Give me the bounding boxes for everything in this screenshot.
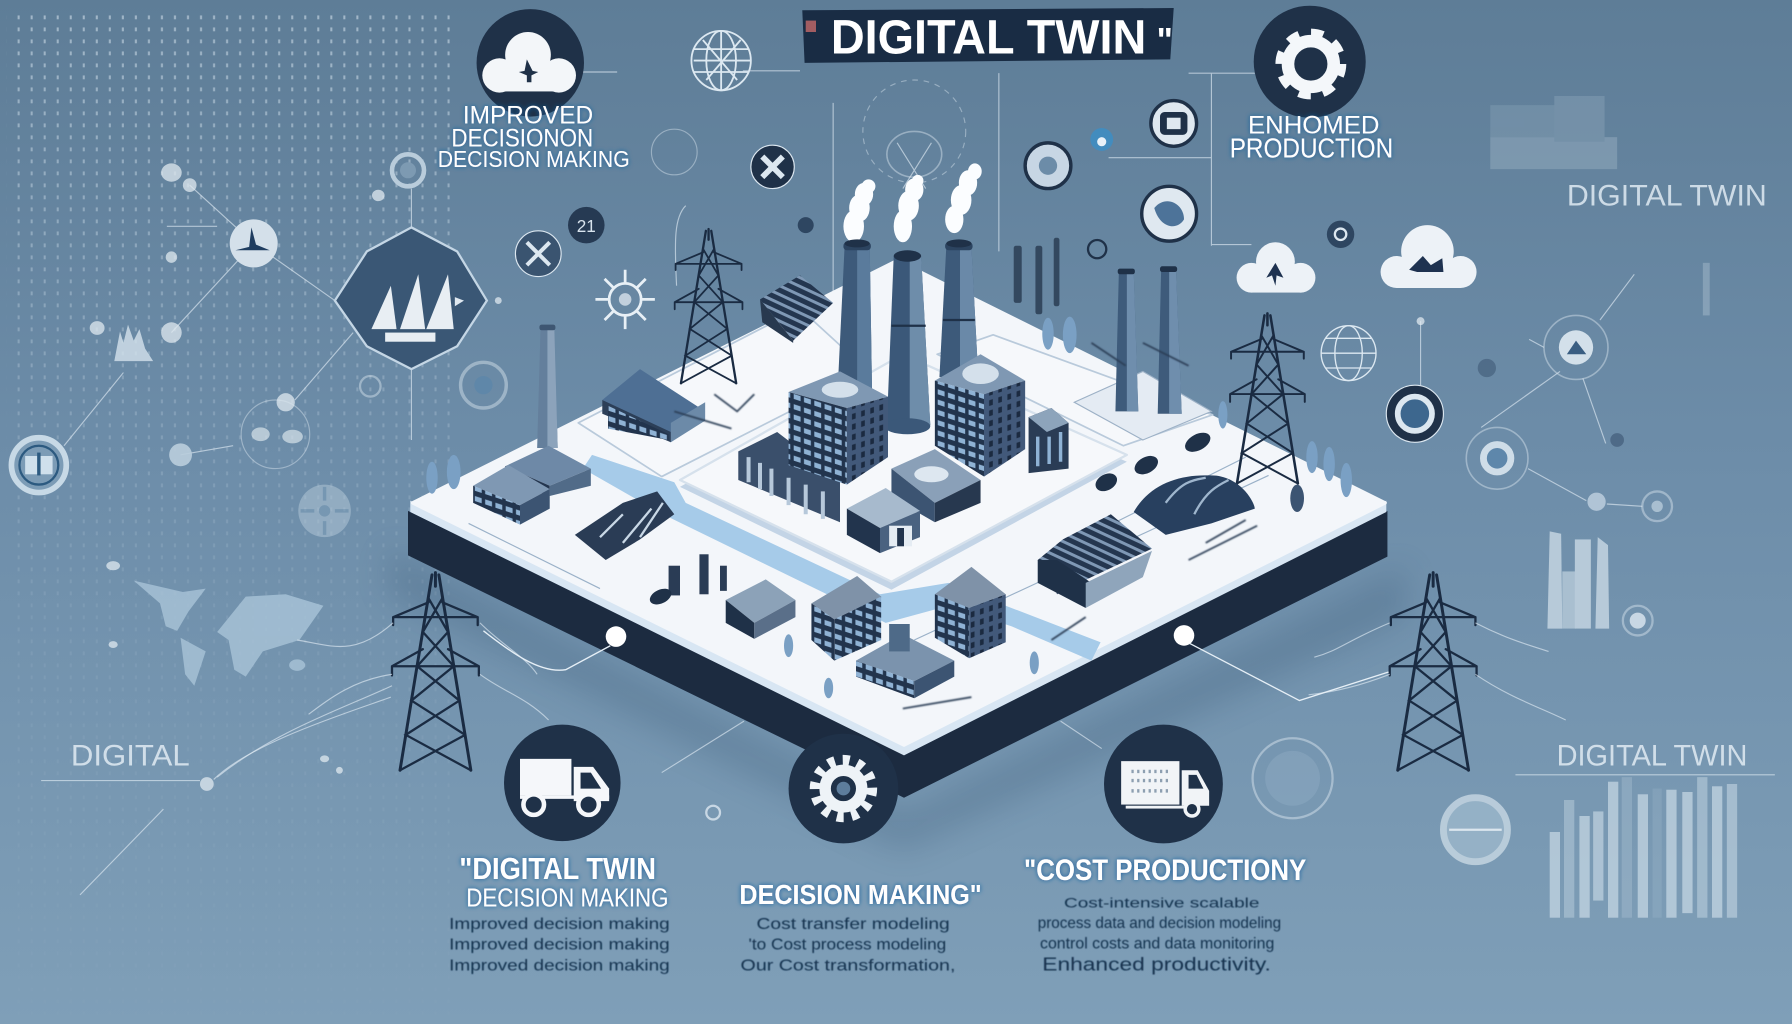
right pylon [1390,573,1477,770]
icon: ring dark 1 [1025,143,1071,189]
icon: dark number circle: 21 [577,216,596,236]
text: enhanced production [1230,112,1393,164]
arcade building [738,432,840,522]
text: improved decision making: DECISIONON [451,124,593,152]
top left plate building [602,369,705,442]
text: cost productivity: process data and decision modeling [1038,915,1281,932]
faded chart panel top right [1490,96,1710,315]
platform rim [410,501,1386,755]
text: improved decision making: DECISION MAKING [438,146,630,172]
bar chart small [1547,531,1609,629]
text: decision making: Cost transfer modeling [757,916,950,933]
small front block [847,488,920,553]
text: cost productivity [1024,854,1306,974]
text: digital twin decision making: Improved decision making [449,937,670,954]
icon: gear in dark circle [1254,6,1366,118]
text: decision making: 'to Cost process modeling [749,937,946,954]
icon: faded ring bottom middle [1253,738,1333,818]
icon: wire globe [691,31,751,90]
chimney center [885,250,930,434]
bar chart large [1550,777,1737,918]
label: DIGITAL left [41,697,391,895]
callout dot right [1174,625,1389,701]
panel: decision making [739,734,982,974]
left pylon [392,573,479,770]
text: decision making: Our Cost transformation, [741,957,955,974]
icon: wire globe right [1321,326,1376,381]
hexagon icon: factory sails [335,227,487,369]
building mid center [891,449,981,522]
text: decision making [739,879,982,974]
platform surface [413,261,1385,745]
icon: delivery truck [1104,725,1223,843]
text: enhanced production: PRODUCTION [1230,133,1393,164]
icon: cloud small [1237,242,1315,293]
text: improved decision making [438,101,630,172]
label: DIGITAL left: DIGITAL [71,740,190,773]
text: digital twin decision making: Improved decision making [449,957,670,974]
grey box building [726,579,795,639]
machinery cluster [575,491,727,595]
platform [408,261,1387,798]
icon: cloud large [1381,225,1477,288]
icon: pale factory [114,325,153,361]
platform shadow [389,549,1406,851]
label: DIGITAL TWIN right bottom: DIGITAL TWIN [1557,740,1747,773]
tower B [935,354,1025,477]
panel: digital twin decision making [449,725,670,974]
power wires [217,623,1566,777]
corrugated roof building [760,275,833,343]
panel: cost productivity [1024,725,1306,974]
left group building 1 [505,446,591,496]
icon: network node [230,219,278,267]
world map [134,581,323,686]
left network diagram [11,154,506,774]
smoke [843,163,982,242]
icon: network gear [595,270,655,329]
quonset hall [1134,475,1255,535]
icon: blue drop [1090,128,1113,151]
site clutter [674,343,1257,709]
plate top left [578,309,869,477]
title banner: " [1157,21,1173,59]
text: digital twin decision making [449,851,670,974]
building block right [1029,408,1069,473]
icon: ring dark 2 [1151,101,1197,146]
text: improved decision making: IMPROVED [463,101,593,129]
chimney back left [838,239,872,389]
plate central [680,361,1127,590]
mid building left [811,576,881,661]
water channel [583,455,1101,661]
icon: dark X circle 2 [515,231,561,277]
icon: ring dark 3 [1142,186,1197,241]
text: cost productivity: "COST PRODUCTIONY [1024,854,1306,887]
trees [426,317,1352,698]
text: cost productivity: control costs and data monitoring [1040,936,1274,953]
text: digital twin decision making: "DIGITAL TWIN [459,851,656,886]
text: cost productivity: Cost-intensive scalable [1064,895,1260,910]
text: enhanced production: ENHOMED [1248,112,1379,140]
vehicles on road [647,429,1214,608]
ribbed shed [1038,514,1152,608]
icon: dark G circle [1386,385,1443,442]
icon: faded gear [298,485,351,537]
text: decision making: DECISION MAKING" [739,879,982,910]
icon: faded ring bottom right [1443,798,1507,862]
icon: dark number circle [568,207,605,243]
small faint icons [651,80,966,189]
low plant [856,624,954,698]
icon: gear in dark circle [789,734,898,843]
text: digital twin decision making: DECISION MAKING [466,882,669,912]
callout dot left [483,626,626,670]
icon: truck [504,725,621,841]
left group building 2 [473,465,550,525]
icon: cloud in dark circle [477,9,584,117]
text: cost productivity: Enhanced productivity. [1042,953,1271,974]
label: DIGITAL TWIN right top: DIGITAL TWIN [1567,180,1767,213]
mid building right [935,567,1006,658]
connector lines top [583,71,1425,385]
icon: ring badge [11,438,66,493]
platform base [408,511,1387,798]
panel: enhanced production [1230,6,1393,164]
text: digital twin decision making: Improved decision making [449,916,670,933]
chimney thin left [537,325,558,448]
tower on platform back [675,229,742,383]
chimney pair right [1074,266,1211,440]
icon: dark X circle [751,145,794,189]
right network diagram [1466,274,1672,635]
title banner: DIGITAL TWIN [831,12,1146,65]
plate top right [937,335,1213,446]
panel: improved decision making [438,9,630,172]
dot grid pattern [17,15,450,691]
chimney back right [939,239,978,377]
tower on platform right [1230,313,1305,483]
tower A [789,371,888,485]
